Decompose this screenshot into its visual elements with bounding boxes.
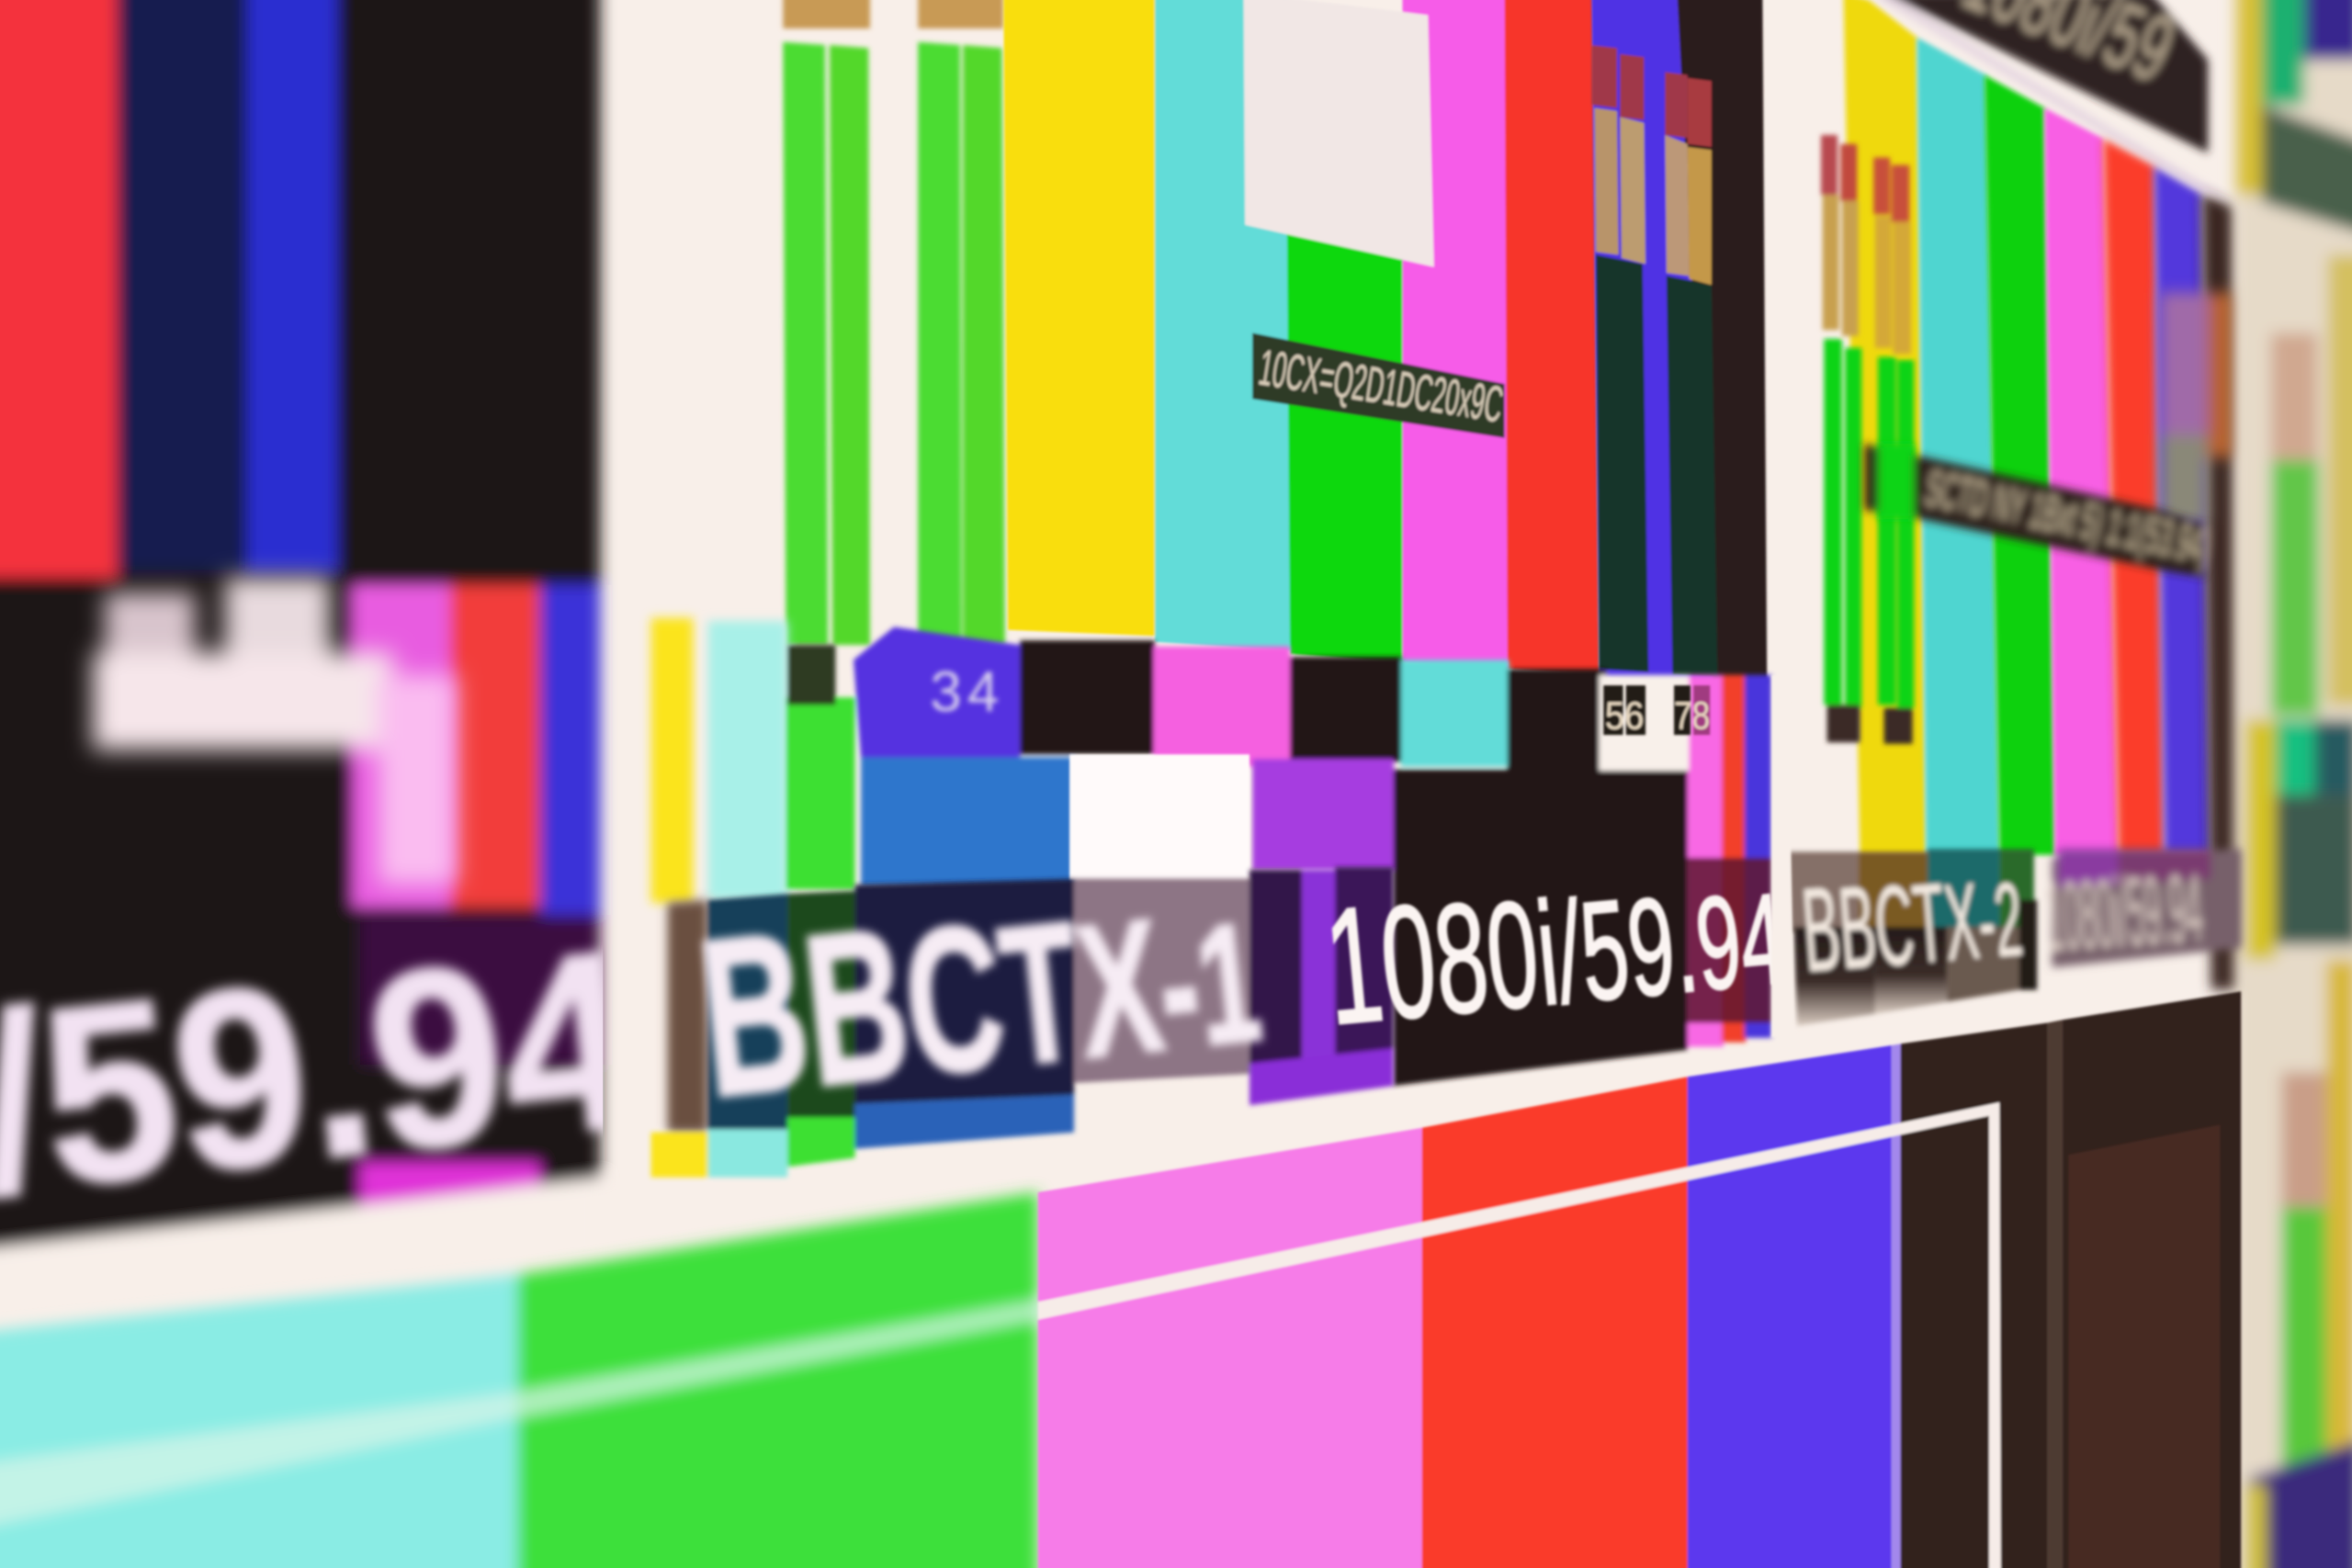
meter number tags 5 6 7 8: 56 [1605,694,1644,737]
panel: middle row of test pattern [651,618,1771,1086]
panel: audio meters, centre right [1591,0,1767,684]
panel: centre colour bars, upper row [783,0,1005,645]
right monitor caption strip: SCTD NY 1Bxt 5) 1:1(53.94) [1920,460,2216,576]
panel: blurred 1080i/59.94 label, right monitor: 1080i/59.94 [2043,852,2205,972]
meter number tags 3 4: 3 4 [930,660,999,724]
heading: BBCTX-1 label text: BBCTX-1 [690,839,1270,1145]
right monitor fading lower blue column [2160,292,2235,525]
right monitor meters [1821,135,1914,744]
panel: BBCTX-2 label: BBCTX-2 [1797,846,2027,998]
panel: right monitor colour bars [1844,0,2241,990]
meter number tags 5 6 7 8 [1603,685,1710,737]
panel: bottom colour bars, sharp right [1038,991,2241,1568]
left monitor blurred white blocks [93,578,456,885]
top right dark caption with blurred text [1869,0,2235,202]
band beneath label [651,1133,708,1178]
dark caption strip with text: 10CX=Q2D1DC20x9C [1255,340,1507,434]
panel: far right blurred monitor [2235,0,2352,1568]
meter number tags 5 6 7 8: 78 [1674,694,1710,737]
white block above label [1069,754,1250,880]
panel: BBCTX-1 label background [651,867,1394,1178]
panel: white divider band [1771,675,1794,1038]
heading: 1080i/59.94 label text: 1080i/59.94 [1318,835,1791,1060]
white box [1243,0,1434,267]
panel: bottom colour bars, blurred left [0,1192,1050,1568]
centre bars: yellow to red [1003,0,1599,675]
panel: blurred left monitor [0,0,603,1349]
thin white outline [1038,1102,2001,1568]
